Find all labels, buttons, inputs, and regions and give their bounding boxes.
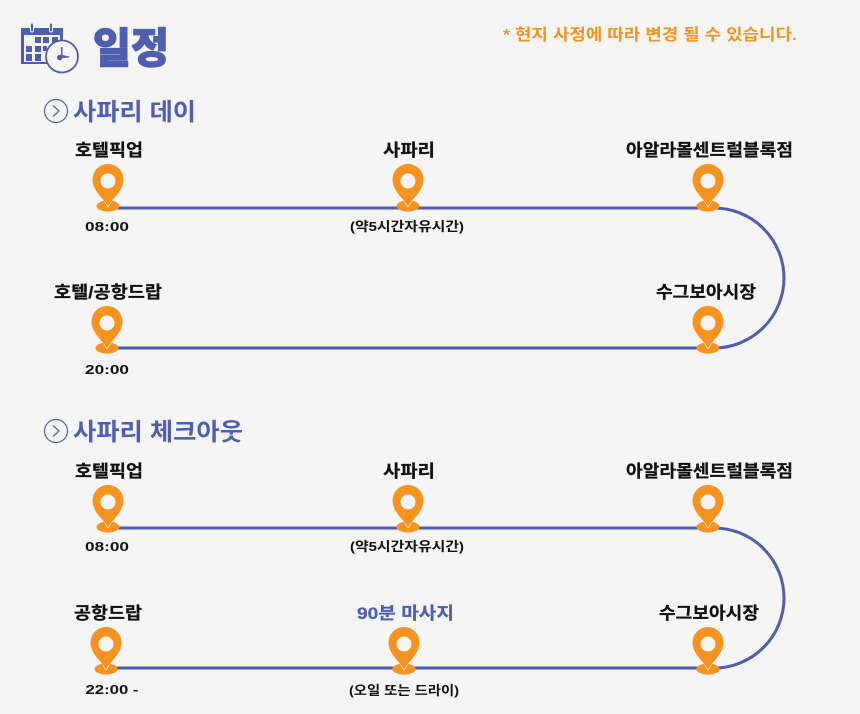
stop: aeon mall <box>626 461 793 532</box>
stop: aeon mall <box>626 140 793 212</box>
icon: section chevron <box>44 100 68 122</box>
stop: hotel pickup: 08:00 <box>85 219 129 234</box>
stop: 90 minute massage: 90분 마사지 <box>357 604 454 623</box>
stop: sugbo market: 수그보아시장 <box>659 604 759 623</box>
stop: sugbo market <box>659 604 759 674</box>
route line <box>108 208 784 348</box>
stop: hotel/airport drop: 20:00 <box>85 362 129 377</box>
stop: hotel pickup: 호텔픽업 <box>75 141 143 160</box>
stop: hotel pickup <box>75 462 143 554</box>
stop: aeon mall: 아알라몰센트럴블록점 <box>626 461 793 481</box>
stop: safari: 사파리 <box>383 462 435 481</box>
title: 일정 <box>93 25 169 72</box>
heading: safari check-out: 사파리 체크아웃 <box>73 419 243 446</box>
stop: 90 minute massage: (오일 또는 드라이) <box>349 683 459 698</box>
stop: safari: (약5시간자유시간) <box>350 539 464 554</box>
icon: section chevron <box>44 420 68 442</box>
icon: calendar with clock <box>21 23 78 72</box>
panel: safari check-out <box>44 419 793 698</box>
stop: hotel pickup: 호텔픽업 <box>75 462 143 481</box>
heading: safari day: 사파리 데이 <box>73 99 196 126</box>
stop: aeon mall: 아알라몰센트럴블록점 <box>626 140 793 160</box>
note: subject to change: * 현지 사정에 따라 변경 될 수 있습니다. <box>503 26 797 44</box>
stop: safari <box>350 462 464 554</box>
stop: hotel pickup: 08:00 <box>85 539 129 554</box>
panel: safari day <box>44 99 793 377</box>
stop: airport drop <box>74 604 142 697</box>
stop: hotel/airport drop: 호텔/공항드랍 <box>54 283 162 302</box>
stop: 90 minute massage <box>349 604 459 698</box>
stop: sugbo market <box>656 283 756 354</box>
stop: hotel/airport drop <box>54 283 162 377</box>
stop: safari: 사파리 <box>383 141 435 160</box>
stop: safari: (약5시간자유시간) <box>350 219 464 234</box>
stop: airport drop: 공항드랍 <box>74 604 142 623</box>
route line <box>106 528 784 668</box>
stop: sugbo market: 수그보아시장 <box>656 283 756 302</box>
stop: safari <box>350 141 464 234</box>
stop: airport drop: 22:00 - <box>86 682 138 697</box>
stop: hotel pickup <box>75 141 143 234</box>
